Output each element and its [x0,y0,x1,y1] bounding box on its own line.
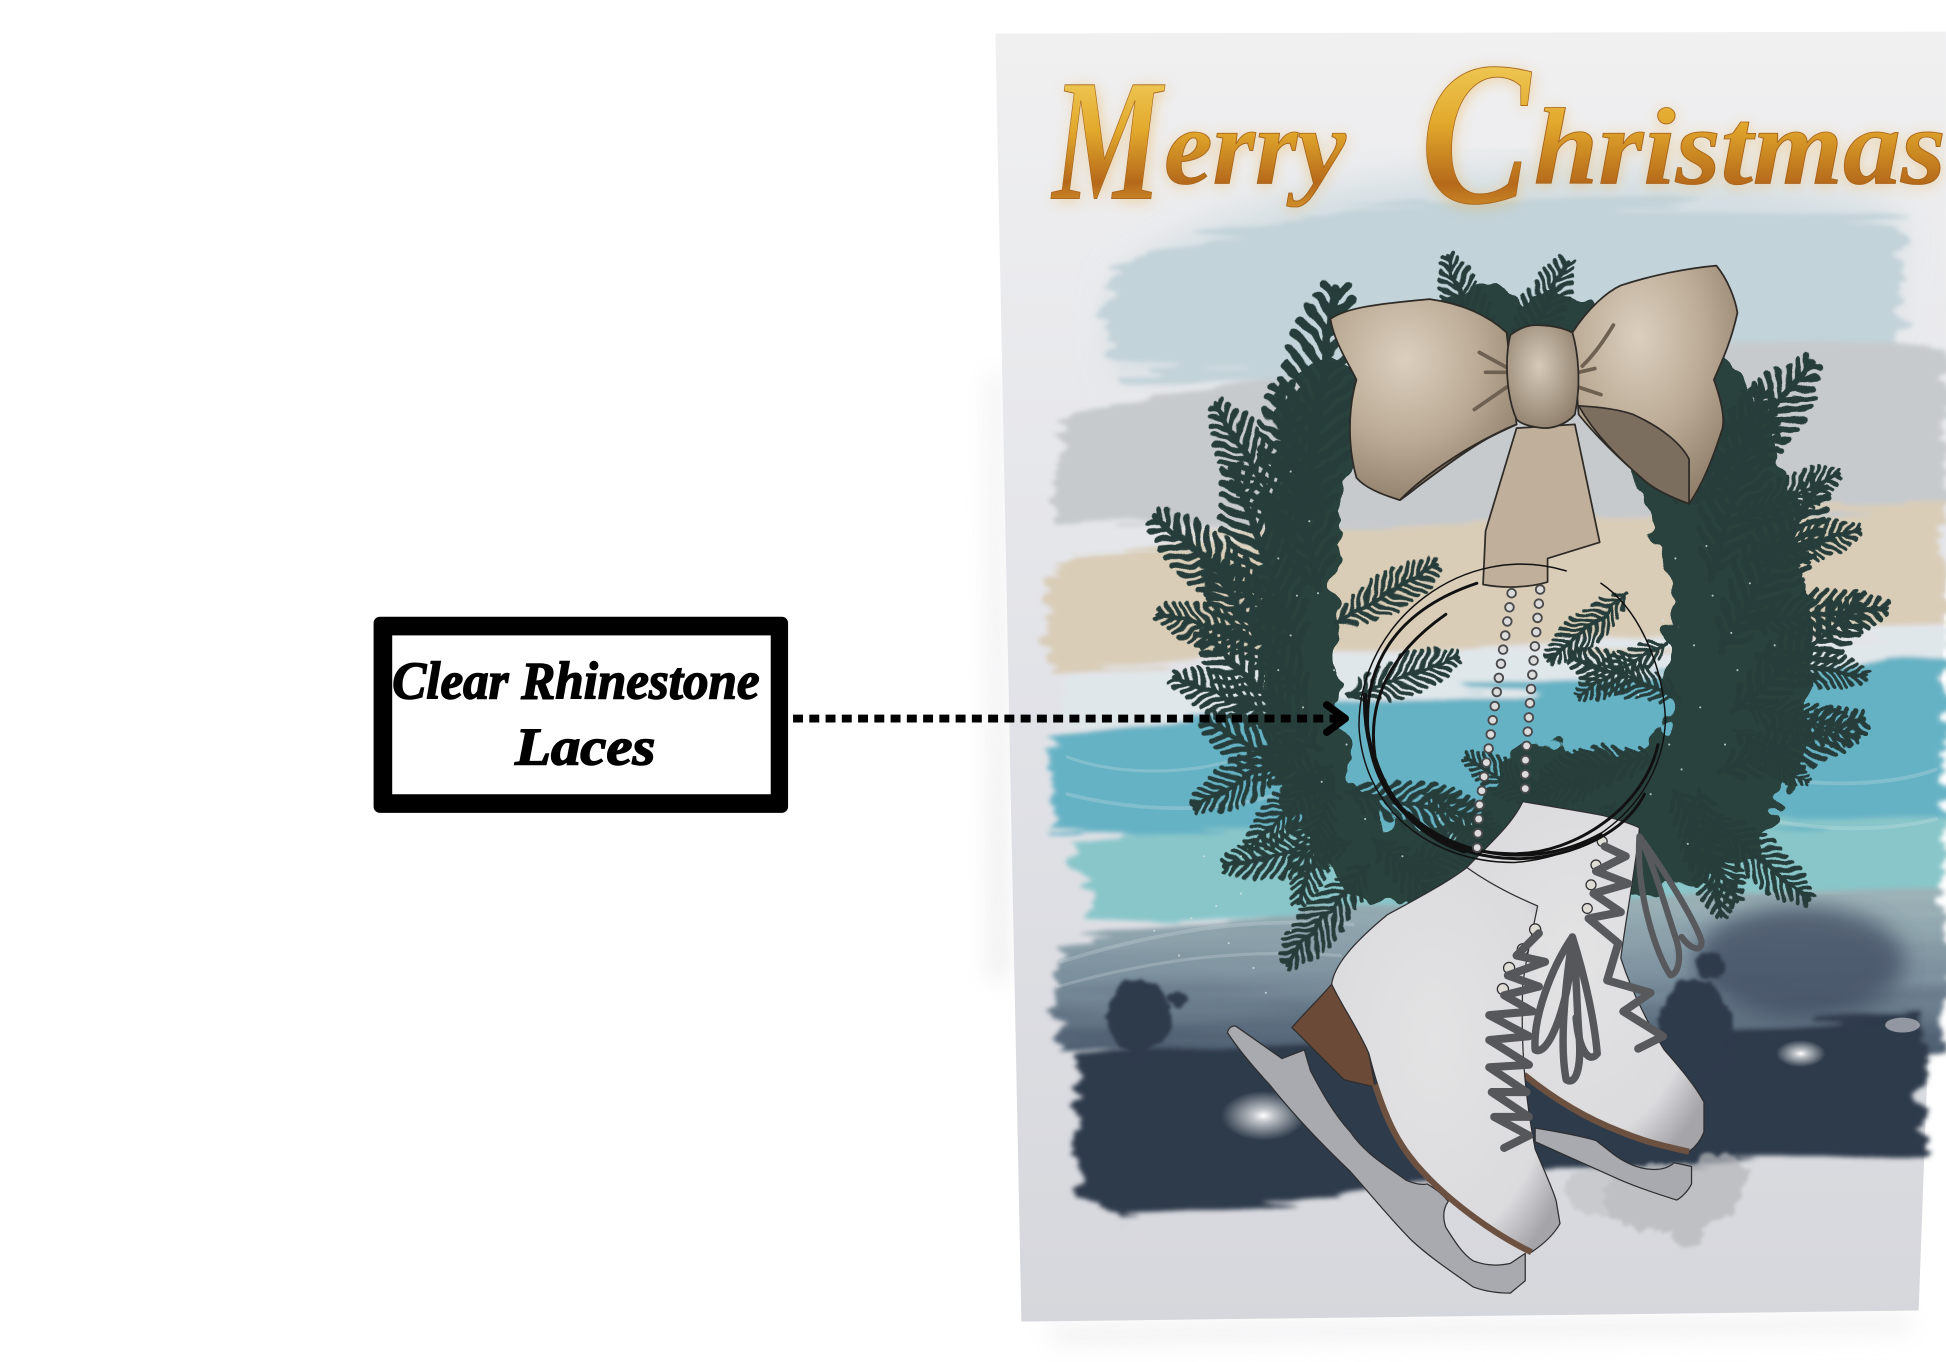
title: Merry Christmas [1050,24,1946,250]
icon: light glints [1221,1018,1920,1140]
front blade [1227,1026,1525,1293]
card paper [995,32,1946,1322]
bow [1330,266,1737,587]
title text: Christmas: C [1421,21,1532,247]
rear laces [1589,836,1702,1049]
bow underside shadows [1579,406,1689,504]
panel: dark ink blotches [1107,906,1905,1080]
front sole [1375,1085,1531,1252]
title glow [1053,24,1946,250]
brush streak highlights [1055,546,1936,987]
wreath of pine branches [1135,247,1889,979]
rear rivets [1582,836,1607,913]
callout text [392,651,760,776]
wreath dark mass [1296,329,1740,871]
rear sole [1524,1075,1689,1152]
front ice skate [1227,867,1597,1293]
title glow: C [1422,24,1533,250]
hoop circle highlighting laces [1359,564,1665,862]
front laces [1489,933,1597,1148]
wreath needles [1135,247,1889,979]
bow left loop [1330,299,1517,500]
callout frame [374,617,788,813]
title glow: erry [1164,89,1346,210]
title glow: hristmas [1534,89,1946,210]
front rivets [1497,924,1541,995]
callout text: Clear Rhinestone [392,651,760,711]
greeting card [995,21,1946,1322]
wreath sparkles [1154,472,1775,993]
callout box: Clear Rhinestone Laces [374,617,788,813]
panel: grey splash at the bottom [1565,1152,1749,1245]
title text: Christmas [1421,21,1946,247]
bow tail [1483,424,1600,587]
title glow: M [1053,46,1168,239]
panel: painted brush background [1045,169,1946,1222]
front boot [1332,867,1560,1252]
rear ice skate [1467,802,1704,1200]
callout text: Laces [514,716,655,776]
rear boot [1467,802,1704,1152]
bow right loop [1572,266,1737,504]
pale haze behind brush strokes [1117,169,1899,372]
front heel [1292,984,1375,1087]
title text: erry [1164,87,1347,208]
bow fold lines [1474,325,1613,410]
title text: M [1050,44,1166,237]
card shadow [987,372,1911,1346]
arrow from callout to laces [793,705,1345,732]
rhinestone laces [1477,589,1540,854]
title text: Christmas: hristmas [1534,87,1946,208]
bow knot [1507,325,1578,428]
brush bands [1045,201,1946,1222]
rear blade [1535,1128,1692,1200]
